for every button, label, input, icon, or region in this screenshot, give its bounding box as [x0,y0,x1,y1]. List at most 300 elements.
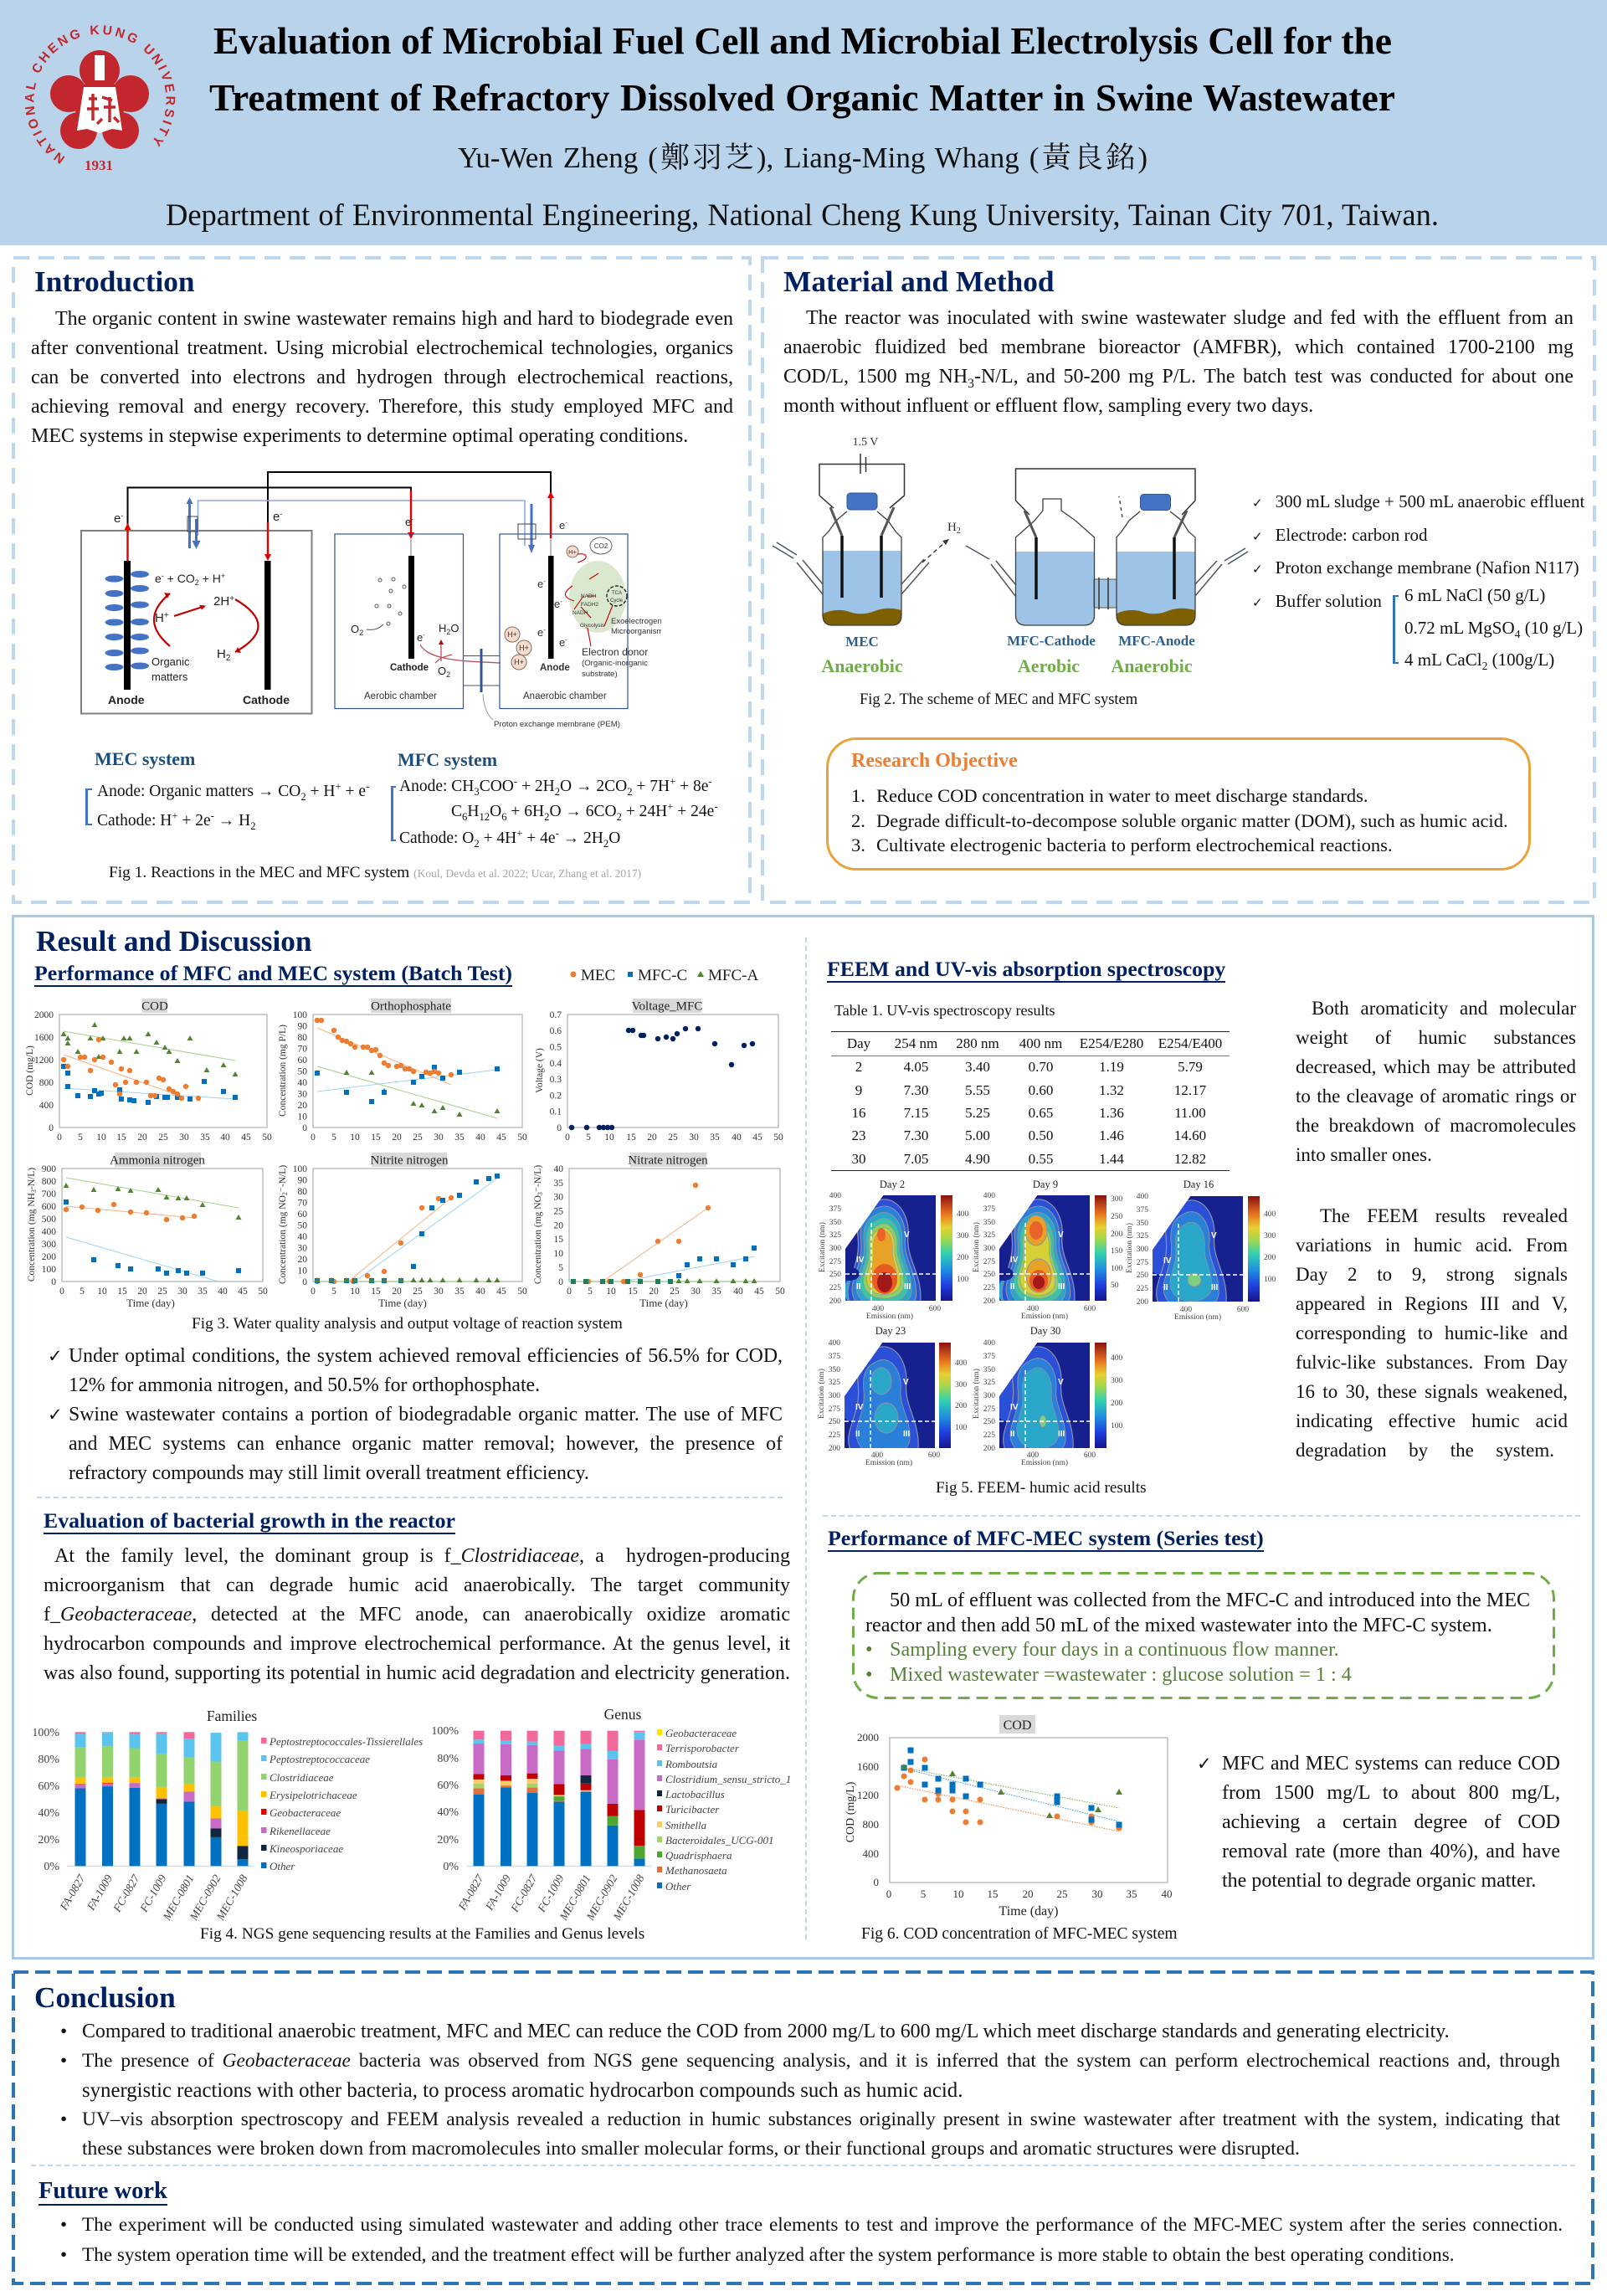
chart: output voltage: 0.1 [550,1107,562,1117]
chart: FEEM contour maps: 275 [983,1258,995,1266]
table: UV-vis results: 7.30 [904,1127,928,1143]
FEEM: day 2: V [904,1230,910,1240]
chart: orthophosphate: 60 [298,1056,307,1066]
heading: FEEM and UV-vis: FEEM and UV-vis absorption spectroscopy [827,957,1225,981]
heading: conclusion: Conclusion [34,1981,176,2014]
table: UV-vis results: 30 [852,1151,865,1167]
chart: genus stacked bars: MEC-0902 [583,1872,620,1923]
chart: FEEM contour maps: 325 [829,1231,841,1240]
chart: FEEM contour maps: 275 [829,1405,840,1414]
FEEM: day 16: II [1163,1283,1168,1292]
legend: genus: Smithella [665,1819,707,1831]
chart: COD: 1600 [34,1033,54,1043]
FEEM: day 16 [1153,1196,1243,1302]
legend: genus: Other [665,1880,691,1893]
table: UV-vis results: 11.00 [1174,1105,1206,1121]
MFC aerobic chamber: O [450,622,460,634]
table: UV-vis results: 3.40 [965,1059,990,1075]
MFC anaerobic chamber: Cycle [610,598,624,604]
chart: COD: 30 [179,1133,189,1143]
chart: FEEM contour maps: 100 [955,1424,968,1432]
chart: nitrite nitrogen: 20 [298,1255,307,1265]
text: aromaticity discussion: decreased, which may be attributed [1296,1056,1576,1077]
chart: FEEM contour maps: 400 [1137,1193,1148,1201]
chart: FEEM contour maps: Excitation (nm) [972,1369,981,1419]
equations: MEC: Anode: Organic matters → CO2 + H+ + e- [97,780,369,803]
chart: FEEM contour maps: 300 [1137,1246,1148,1254]
chart: nitrate nitrogen: 30 [554,1192,563,1202]
chart: series test COD: 10 [952,1888,964,1900]
chart: FEEM contour maps: 375 [983,1205,995,1214]
text: FEEM discussion: 16 to 30, these signals weakened, [1296,1381,1568,1402]
table: UV-vis results: 254 nm [895,1035,937,1051]
MFC anaerobic chamber: e [537,578,543,590]
chart: orthophosphate: 30 [434,1133,444,1143]
chart: nitrate nitrogen: 3 [537,1192,544,1195]
chart: output voltage: 5 [586,1133,591,1143]
chart: FEEM contour maps: 200 [1264,1254,1276,1262]
chart: output voltage: 0 [557,1123,562,1133]
chart: nitrite nitrogen: 10 [350,1287,360,1297]
MFC anaerobic chamber: Electron donor [582,646,648,658]
callout: series test conditions [852,1572,1555,1699]
chart: FEEM contour maps: 325 [1137,1232,1148,1240]
chart: ammonia nitrogen: -N/L) [27,1168,37,1189]
chart: ammonia nitrogen: 200 [42,1252,56,1262]
legend: genus: Geobacteraceae [665,1727,737,1739]
heading: future work: Future work [39,2178,167,2204]
chart: nitrite nitrogen: 5 [331,1287,336,1297]
chart: output voltage: Voltage_MFC [632,999,702,1013]
external circuit wires [124,472,554,561]
legend: genus: Romboutsia [665,1758,718,1770]
chart: nitrite nitrogen: 90 [298,1175,307,1185]
caption: figure 6: Fig 6. COD concentration of MFC-MEC system [861,1925,1178,1943]
list: experimental setup: 0.72 mL MgSO4 (10 g/L) [1404,618,1583,640]
chart: FEEM contour maps: 225 [829,1284,841,1292]
heading: bacterial growth: Evaluation of bacterial growth in the reactor [44,1508,455,1533]
FEEM: day 30: III [1058,1430,1065,1439]
chart: FEEM contour maps: 200 [829,1297,841,1306]
table: UV-vis results: 400 nm [1019,1035,1062,1051]
chart: nitrate nitrogen: 15 [554,1235,563,1245]
FEEM: day 23 [845,1343,935,1448]
chart: output voltage [535,999,783,1143]
list: objectives: Cultivate electrogenic bacteria to perform electrochemical reactions. [876,835,1393,855]
chart: nitrate nitrogen: 25 [670,1287,680,1297]
chart: FEEM contour maps: 400 [1027,1305,1039,1313]
chart: nitrate nitrogen: Concentration (mg NO [533,1195,543,1284]
MFC anaerobic chamber [500,519,667,708]
FEEM: day 30: II [1010,1430,1015,1439]
text: FEEM discussion: variations in humic acid. From [1296,1235,1568,1256]
chart: orthophosphate: 100 [293,1010,307,1020]
MFC aerobic chamber: - [411,516,413,523]
chart: genus stacked bars: 80% [437,1753,459,1765]
legend: genus: Clostridium_sensu_stricto_1 [665,1773,791,1785]
chart: FEEM contour maps: 600 [929,1305,941,1313]
chart: series test COD: 1200 [857,1789,879,1801]
MFC aerobic chamber: - [423,631,425,639]
chart: FEEM contour maps: Emission (nm) [1021,1312,1068,1321]
panel: result and discussion: ✓ [48,1346,63,1366]
heading: series test: Performance of MFC-MEC system (Series test) [828,1526,1264,1550]
text: aromaticity discussion: into smaller ones. [1296,1144,1432,1165]
MFC anaerobic chamber: e [559,519,565,532]
chart: COD: 45 [241,1133,251,1143]
chart: series test COD: 0 [886,1888,891,1900]
chart: FEEM contour maps: 400 [983,1192,995,1200]
heading: MEC system: MEC system [95,748,195,769]
chart: FEEM contour maps: Emission (nm) [865,1458,912,1467]
chart: FEEM contour maps: 225 [983,1284,995,1292]
legend: series: MEC [581,967,615,984]
chart: FEEM contour maps: 300 [1111,1195,1123,1204]
chart: FEEM contour maps: 400 [957,1210,969,1219]
chart: ammonia nitrogen: 20 [137,1287,147,1297]
FEEM: day 2: III [904,1282,911,1292]
chart: series test COD: Time (day) [999,1904,1058,1918]
text: FEEM discussion: fulvic-like substances. From Day [1296,1352,1568,1373]
chart: ammonia nitrogen: 500 [42,1215,56,1225]
chart: FEEM contour maps: 400 [1111,1354,1123,1363]
FEEM: day 30 [999,1343,1090,1448]
chart: genus stacked bars: FA-1009 [482,1872,513,1913]
list: experimental setup: ✓ Buffer solution [1252,591,1382,611]
list: future work: The experiment will be conducted using simulated wastewater and adding other trace elements to test and improve the performance of the MFC-MEC system after the series connection. [82,2214,1563,2236]
MFC aerobic chamber: H [439,622,446,634]
list: batch test findings: Swine wastewater contains a portion of biodegradable organic matter. The use of MFC [69,1404,783,1425]
legend: families: Erysipelotrichaceae [269,1789,357,1801]
list: batch test findings: 12% for ammonia nitrogen, and 50.5% for orthophosphate. [69,1374,540,1396]
chart: FEEM contour maps: 375 [829,1353,840,1361]
chart: FEEM contour maps: 275 [1137,1259,1148,1267]
chart: output voltage: 0 [565,1133,570,1143]
MFC aerobic chamber: O [351,623,359,635]
text: FEEM discussion [1296,1205,1568,1461]
equations: MFC: Cathode: O2 + 4H+ + 4e- → 2H2O [399,827,620,850]
chart: ammonia nitrogen: 25 [157,1287,167,1297]
chart: FEEM contour maps: 300 [829,1392,840,1400]
legend: families: Peptostreptococcaceae [269,1753,370,1765]
MEC chamber: + [164,611,169,620]
MEC chamber: + CO [164,572,195,585]
MEC reactor [773,454,949,625]
table: UV-vis results: 7.05 [904,1151,928,1167]
chart: FEEM contour maps: Day 9 [1033,1179,1058,1190]
MFC anaerobic chamber: e [554,598,560,610]
chart: orthophosphate: Orthophosphate [371,999,451,1013]
MFC anaerobic chamber: (Organic-inorganic [582,659,648,668]
MFC aerobic chamber: 2 [359,629,363,637]
caption: figure 2: Fig 2. The scheme of MEC and MFC system [860,691,1137,708]
chart: nitrite nitrogen: Time (day) [378,1297,427,1309]
chart: COD: COD [141,999,168,1013]
MFC aerobic chamber: Aerobic chamber [364,691,437,701]
chart: FEEM contour maps: Excitation (nm) [818,1222,827,1272]
MEC chamber: e [114,511,121,526]
chart: ammonia nitrogen: 10 [97,1287,107,1297]
chart: nitrate nitrogen: Nitrate nitrogen [628,1153,708,1167]
legend: genus: Bacteroidales_UCG-001 [665,1834,773,1847]
MFC anaerobic chamber: substrate) [582,670,618,679]
chart: FEEM contour maps: 200 [1111,1230,1123,1239]
chart: nitrate nitrogen: 30 [691,1287,701,1297]
MFC aerobic chamber: 2 [446,670,450,679]
chart: nitrite nitrogen: 10 [298,1266,307,1276]
text: series test procedure: reactor and then add 50 mL of the mixed wastewater into the MFC-C system. [865,1614,1492,1636]
MEC chamber: Cathode [243,693,290,706]
text: introduction paragraph: MEC systems in stepwise experiments to determine optimal operating conditions. [31,425,688,447]
panel: conclusion and future work: • [60,2050,67,2072]
table: UV-vis results: 14.60 [1174,1127,1206,1143]
chart: FEEM contour maps: 400 [871,1451,883,1460]
panel: conclusion and future work: • [60,2244,67,2266]
table: UV-vis results: 1.19 [1099,1059,1124,1075]
chart: FEEM contour maps: 50 [1111,1282,1119,1290]
chart: families stacked bars: 40% [38,1807,59,1820]
text: bacterial growth paragraph: hydrocarbon compounds and improve electrochemical performance. At the genus level, it [44,1633,790,1655]
MEC chamber: e [155,572,162,585]
table: UV-vis results: 0.50 [1029,1127,1053,1143]
chart: FEEM contour maps: 100 [1111,1265,1123,1273]
chart: nitrite nitrogen: 70 [298,1199,307,1209]
list: series test finding: from 1500 mg/L to about 800 mg/L, [1222,1782,1560,1804]
chart: ammonia nitrogen: 600 [42,1202,56,1212]
table: UV-vis results: 4.90 [965,1151,990,1167]
chart: genus stacked bars: 0% [443,1861,459,1873]
heading: MFC system: MFC system [398,749,497,770]
MFC anaerobic chamber: H+ [519,644,529,652]
chart: nitrite nitrogen: 50 [298,1220,307,1230]
MFC anaerobic chamber: - [565,636,567,644]
chart: series test COD: 35 [1127,1888,1137,1900]
caption: figure 4: Fig 4. NGS gene sequencing results at the Families and Genus levels [200,1925,644,1943]
MFC anaerobic chamber: H+ [507,630,517,639]
chart: nitrite nitrogen: Concentration (mg NO [278,1195,288,1284]
panel: conclusion and future work: • [60,2214,67,2236]
chart: orthophosphate: 15 [371,1133,381,1143]
MFC anaerobic chamber: FADH2 [581,602,598,608]
list: experimental setup: 4 mL CaCl2 (100g/L) [1404,650,1554,672]
chart: FEEM contour maps: 150 [1111,1247,1123,1256]
equations: MFC [399,775,718,850]
table: UV-vis results: 5.55 [965,1082,990,1098]
chart: FEEM contour maps: 375 [1137,1206,1148,1215]
table: UV-vis results: 1.32 [1099,1082,1124,1098]
chart: FEEM contour maps: 375 [983,1353,995,1361]
MFC anaerobic chamber: Anaerobic chamber [523,691,607,701]
MEC chamber: - [280,510,282,518]
list: batch test findings: refractory compounds may still limit overall treatment efficiency. [69,1462,589,1484]
FEEM: day 16: III [1211,1283,1219,1292]
table: UV-vis results [831,1031,1230,1171]
reactor labels: MFC-Cathode [1007,633,1096,649]
list: conclusions [82,2017,1560,2164]
text: FEEM discussion: corresponding to humic-like and [1296,1323,1568,1343]
chart: FEEM contour maps: 600 [1084,1305,1096,1313]
chart: output voltage: 0.5 [550,1043,562,1053]
equations: MEC [97,780,369,832]
chart: ammonia nitrogen: 0 [59,1287,64,1297]
chart: FEEM contour maps: 600 [928,1451,940,1460]
chart: families stacked bars: 20% [38,1834,59,1847]
chart: FEEM contour maps: 200 [1111,1400,1123,1408]
panel: result and discussion: ✓ [48,1405,63,1425]
chart: nitrite nitrogen: 45 [496,1287,506,1297]
chart: genus stacked bars: FA-0827 [455,1872,486,1913]
text: introduction paragraph: can be converted into electrons and hydrogen through electrochemical reactions, [31,367,733,388]
chart: series test COD: 25 [1056,1888,1068,1900]
chart: families stacked bars [32,1708,423,1923]
chart: ammonia nitrogen: 900 [42,1164,56,1174]
chart: output voltage: 0.7 [550,1010,562,1020]
chart: COD: COD (mg/L) [25,1045,35,1096]
chart: output voltage: 10 [604,1133,614,1143]
list: batch test findings: Under optimal conditions, the system achieved removal efficiencies of 56.5% for COD, [69,1345,783,1367]
text: bacterial growth paragraph: microorganism that can degrade humic acid anaerobically. The target community [44,1574,790,1596]
chart: nitrate nitrogen: 10 [554,1249,563,1259]
chart: genus stacked bars: Genus [604,1706,642,1723]
MEC chamber: 2 [226,654,231,663]
list: conclusions: these substances were broken down from macromolecules into smaller molecular forms, or their functional groups and aromatic structures were disrupted. [82,2138,1300,2160]
reactor labels: 2 [957,526,961,536]
reactor labels: MEC [845,634,879,650]
chart: FEEM contour maps: 400 [1027,1451,1039,1460]
chart: orthophosphate: 20 [392,1133,402,1143]
legend: genus: Lactobacillus [665,1788,725,1800]
table: UV-vis results: 0.55 [1029,1151,1053,1167]
MFC anaerobic chamber: CO2 [594,542,608,550]
chart: orthophosphate: 0 [302,1123,307,1133]
chart: output voltage: 45 [752,1133,762,1143]
chart: nitrite nitrogen: 30 [298,1244,307,1254]
chart: FEEM contour maps: 325 [829,1379,840,1387]
legend: genus: Turicibacter [665,1803,720,1816]
chart: orthophosphate: 45 [496,1133,506,1143]
chart: FEEM contour maps: 400 [829,1192,841,1200]
list: experimental setup: ✓ Proton exchange membrane (Nafion N117) [1252,557,1579,578]
diagram: MEC and MFC reactions [80,471,661,729]
list: series test finding: removal rate (more than 40%), and have [1222,1841,1560,1862]
chart: families stacked bars: FC-0827 [110,1872,142,1915]
chart: FEEM contour maps: 300 [1111,1377,1123,1385]
text: series test procedure: Mixed wastewater =wastewater : glucose solution = 1 : 4 [890,1662,1352,1686]
chart: families stacked bars: 100% [32,1727,59,1739]
list: objectives: Degrade difficult-to-decompose soluble organic matter (DOM), such as humic acid. [876,810,1508,830]
FEEM: day 2: IV [856,1256,865,1265]
chart: FEEM contour maps: 350 [1137,1220,1148,1228]
legend: series [571,967,758,984]
list: future work [82,2210,1563,2270]
text: FEEM discussion: indicating effective humic acid [1296,1410,1568,1431]
chart: ammonia nitrogen [27,1153,268,1309]
chart: ammonia nitrogen: Concentration (mg NH [27,1193,37,1282]
chart: FEEM contour maps: 225 [983,1431,995,1440]
chart: nitrate nitrogen: 15 [628,1287,638,1297]
chart: FEEM contour maps: 100 [1111,1422,1123,1431]
chart: nitrite nitrogen: 0 [311,1287,316,1297]
chart: nitrite nitrogen: 0 [302,1277,307,1287]
legend: families [261,1735,423,1872]
table: UV-vis results: 4.05 [904,1059,928,1075]
chart: nitrite nitrogen: 40 [475,1287,485,1297]
chart: FEEM contour maps: 200 [957,1254,969,1262]
chart: orthophosphate: Concentration (mg P/L) [278,1025,288,1117]
chart: orthophosphate: 10 [298,1112,307,1122]
MEC chamber: + [221,572,225,580]
chart: FEEM contour maps: 225 [829,1431,840,1440]
chart: ammonia nitrogen: 5 [80,1287,85,1297]
MEC chamber: Organic [151,655,190,668]
text: method paragraph: The reactor was inoculated with swine wastewater sludge and fed with the effluent from an [806,307,1574,329]
chart: orthophosphate: 5 [331,1133,336,1143]
chart: FEEM contour maps: 400 [872,1305,884,1313]
FEEM: day 23: IV [855,1403,864,1412]
list: series test finding [1197,1753,1560,1892]
chart: ammonia nitrogen: 50 [258,1287,268,1297]
chart: FEEM contour maps: 250 [983,1271,995,1279]
chart: orthophosphate: 40 [298,1078,307,1088]
text: series test procedure: Sampling every four days in a continuous flow manner. [890,1638,1339,1661]
chart: FEEM contour maps: Excitation (nm) [1125,1223,1134,1273]
legend: families: Clostridiaceae [270,1771,334,1784]
chart: ammonia nitrogen: Ammonia nitrogen [110,1153,205,1167]
FEEM: day 23: II [855,1430,860,1439]
chart: ammonia nitrogen: 100 [42,1265,56,1275]
chart: genus stacked bars: MEC-1008 [610,1872,647,1923]
chart: FEEM contour maps: Day 16 [1183,1179,1214,1190]
legend: families: Other [270,1860,295,1872]
chart: output voltage: 40 [732,1133,742,1143]
chart: families stacked bars: MEC-1008 [213,1872,250,1923]
chart: genus stacked bars: 60% [437,1780,459,1792]
chart: COD: 15 [116,1133,126,1143]
text: aromaticity discussion: Both aromaticity and molecular [1312,998,1576,1019]
MFC aerobic chamber: e [405,516,411,528]
chart: FEEM contour maps: 200 [1137,1298,1148,1307]
chart: output voltage: 35 [710,1133,720,1143]
list: objectives: 2. [851,810,865,830]
list: batch test findings [48,1345,783,1484]
chart: nitrite nitrogen: 25 [413,1287,423,1297]
FEEM: day 16: IV [1163,1256,1172,1266]
FEEM: day 9: II [1010,1282,1015,1292]
chart: families stacked bars: 0% [44,1861,59,1873]
chart: FEEM contour maps: 400 [1180,1306,1192,1314]
heading: material and method: Material and Method [783,265,1055,298]
chart: FEEM contour maps: 250 [829,1271,841,1279]
chart: ammonia nitrogen: 400 [42,1227,56,1237]
chart: nitrate nitrogen: 45 [754,1287,764,1297]
heading: result and discussion: Result and Discussion [36,925,312,958]
chart: ammonia nitrogen: 0 [51,1277,56,1287]
chart: genus stacked bars: FC-1009 [535,1872,567,1915]
chart: FEEM contour maps: 250 [1137,1271,1148,1280]
chart: FEEM contour maps: 400 [829,1339,840,1348]
chart: series test COD: 0 [874,1876,879,1888]
reactor labels: Anaerobic [821,655,903,676]
chart: orthophosphate: 50 [517,1133,527,1143]
chart: orthophosphate: 40 [475,1133,485,1143]
chart: nitrate nitrogen: 40 [733,1287,743,1297]
chart: FEEM contour maps: 250 [983,1418,995,1426]
chart: families stacked bars: MEC-0902 [187,1872,223,1923]
table: UV-vis results: 12.17 [1174,1082,1206,1098]
chart: ammonia nitrogen: 30 [177,1287,187,1297]
chart: FEEM contour maps: 200 [829,1445,840,1453]
text: aromaticity discussion: to the cleavage of aromatic rings or [1296,1086,1576,1107]
